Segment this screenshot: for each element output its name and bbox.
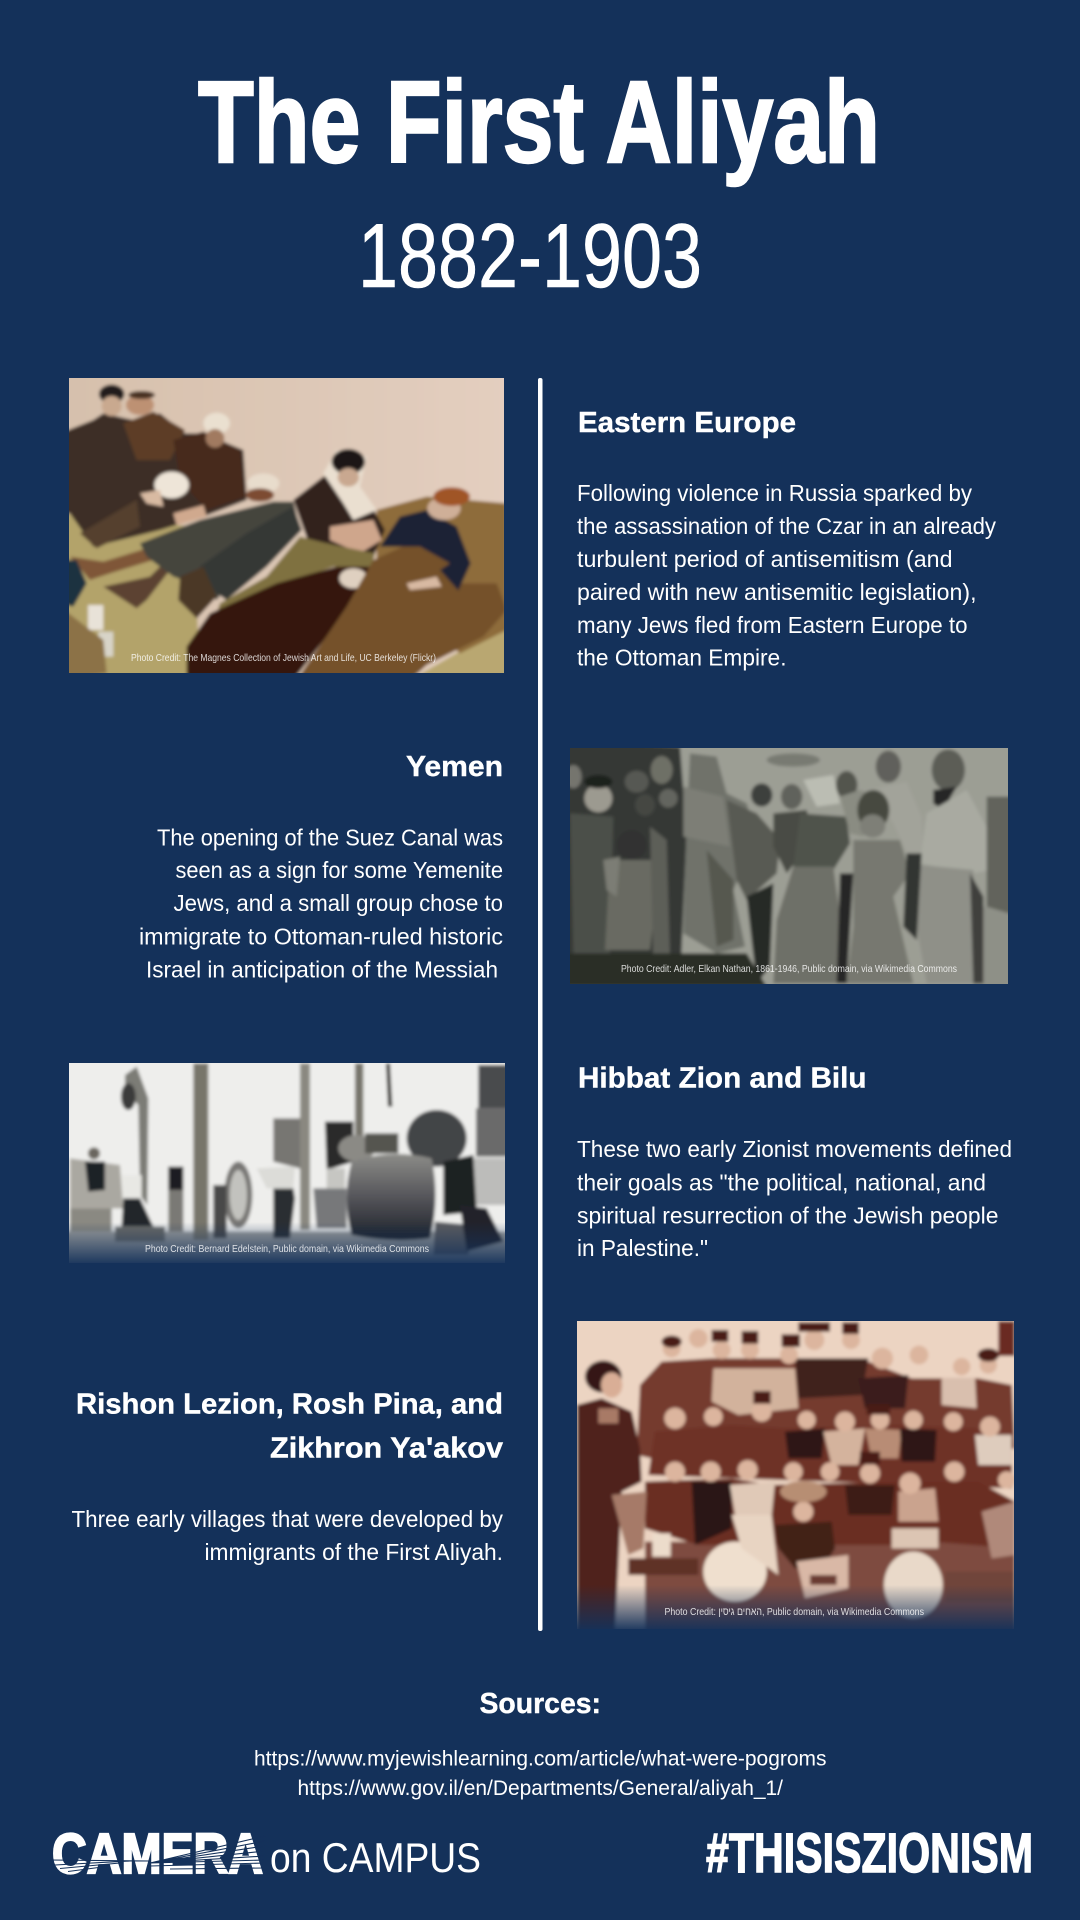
- photo credit: Photo Credit: Adler, Elkan Nathan, 1861-1946, Public domain, via Wikimedia Commons: [621, 963, 957, 975]
- heading: Yemen: Yemen: [406, 751, 503, 783]
- sources heading: Sources:: [480, 1688, 601, 1720]
- heading: Eastern Europe: Eastern Europe: [578, 407, 796, 439]
- photo: children class portrait: [565, 1315, 1025, 1635]
- text block: Hibbat Zion and Bilu: [577, 1136, 1012, 1261]
- woman: [577, 1398, 642, 1635]
- hats: [662, 1322, 999, 1464]
- text block: Eastern Europe: many Jews fled from Eastern Europe to: [577, 612, 968, 638]
- center divider line: [538, 378, 542, 1631]
- text block: Yemen: Jews, and a small group chose to: [174, 890, 503, 916]
- photo credit: Photo Credit: האחים גיסין, Public domain, via Wikimedia Commons: [664, 1606, 924, 1618]
- text block: Hibbat Zion and Bilu: their goals as "the political, national, and: [577, 1170, 986, 1196]
- balls and drum: [703, 1542, 767, 1602]
- text block: villages: immigrants of the First Aliyah.: [204, 1539, 503, 1565]
- logo: CAMERA on CAMPUS: CAMERA: [52, 1822, 263, 1886]
- logo: CAMERA on CAMPUS: on CAMPUS: [270, 1834, 481, 1881]
- chairs: [612, 1492, 647, 1555]
- bottom fade overlay: [577, 1585, 1014, 1630]
- title: The First Aliyah: [198, 57, 880, 187]
- text block: Yemen: [139, 824, 503, 982]
- text block: Yemen: immigrate to Ottoman-ruled historic: [139, 924, 503, 950]
- source links: https://www.myjewishlearning.com/article/what-were-pogroms: [254, 1746, 826, 1770]
- photo credit: Photo Credit: The Magnes Collection of Jewish Art and Life, UC Berkeley (Flickr): [131, 652, 436, 664]
- text block: Yemen: Israel in anticipation of the Messiah: [146, 956, 498, 982]
- heading: Hibbat Zion and Bilu: Hibbat Zion and Bilu: [578, 1062, 866, 1094]
- text block: Eastern Europe: turbulent period of antisemitism (and: [577, 546, 952, 572]
- lower dark ground: [645, 1542, 1015, 1635]
- source links: https://www.gov.il/en/Departments/General/aliyah_1/: [298, 1776, 783, 1800]
- text block: Yemen: The opening of the Suez Canal was: [157, 824, 503, 850]
- photo credit: Photo Credit: Bernard Edelstein, Public domain, via Wikimedia Commons: [145, 1243, 429, 1255]
- subtitle: years: 1882-1903: [358, 206, 702, 307]
- text block: Yemen: seen as a sign for some Yemenite: [176, 857, 503, 883]
- front boy: [780, 1481, 827, 1502]
- heading: Rishon Lezion, Rosh Pina, and Zikhron Ya'akov: Zikhron Ya'akov: [270, 1432, 503, 1464]
- text block: Eastern Europe: the Ottoman Empire.: [577, 644, 786, 670]
- photo: Eastern Europe victims painting: [69, 378, 504, 673]
- photo: Yemenite Jews group: [570, 748, 1008, 984]
- text block: Hibbat Zion and Bilu: spiritual resurrection of the Jewish people: [577, 1202, 998, 1228]
- text block: Hibbat Zion and Bilu: in Palestine.": [577, 1235, 708, 1261]
- faces: [663, 1329, 1015, 1522]
- heading: Rishon Lezion, Rosh Pina, and Zikhron Ya'akov: [76, 1388, 503, 1464]
- logo stripes: [50, 1836, 265, 1872]
- logo: CAMERA on CAMPUS: [50, 1822, 481, 1886]
- text block: villages: [72, 1506, 503, 1565]
- text block: Eastern Europe: [577, 480, 996, 670]
- text block: Eastern Europe: paired with new antisemitic legislation),: [577, 579, 976, 605]
- text block: villages: Three early villages that were developed by: [72, 1506, 503, 1532]
- photo: winery workers and barrels: [69, 1063, 505, 1263]
- text block: Eastern Europe: the assassination of the Czar in an already: [577, 513, 996, 539]
- bottom fade overlay: [69, 1222, 505, 1264]
- heading: Rishon Lezion, Rosh Pina, and Zikhron Ya'akov: Rishon Lezion, Rosh Pina, and: [76, 1388, 503, 1420]
- middle row bodies: [648, 1425, 1012, 1488]
- text block: Hibbat Zion and Bilu: These two early Zionist movements defined: [577, 1136, 1012, 1162]
- front row bodies: [645, 1478, 1015, 1548]
- text block: Eastern Europe: Following violence in Russia sparked by: [577, 480, 972, 506]
- back row bodies: [637, 1358, 1015, 1458]
- source links: [254, 1746, 826, 1800]
